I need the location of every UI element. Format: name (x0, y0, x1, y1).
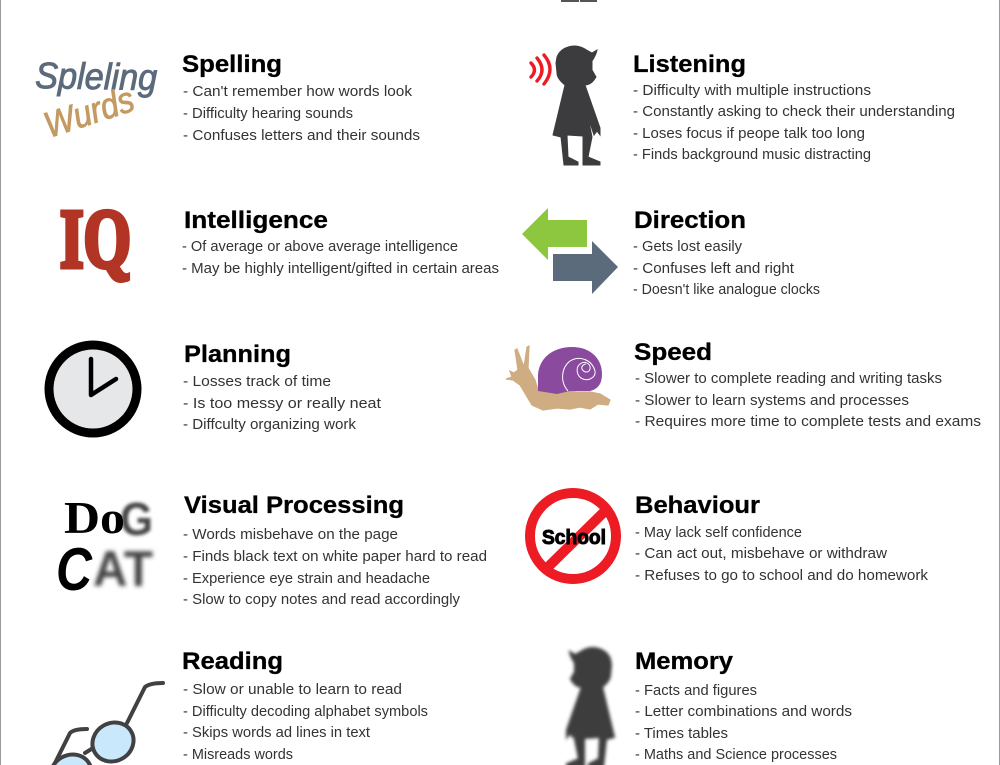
text: speed symptoms: - Requires more time to complete tests and exams (635, 413, 981, 430)
icon: misspelled words: Wurds (39, 78, 139, 146)
icon: snail (506, 346, 610, 410)
panel: spelling (35, 51, 420, 146)
icon: clock (49, 345, 137, 433)
text: visual processing symptoms: - Experience eye strain and headache (183, 570, 430, 587)
panel: intelligence (60, 193, 499, 286)
text: reading symptoms: - Skips words ad lines in text (183, 724, 371, 741)
text: visual processing symptoms: - Finds black text on white paper hard to read (183, 548, 487, 565)
heading: planning: Planning (184, 341, 291, 368)
text: visual processing symptoms: - Words misbehave on the page (183, 526, 398, 543)
text: behaviour symptoms: - Can act out, misbehave or withdraw (635, 545, 887, 562)
text: planning symptoms: - Is too messy or really neat (183, 395, 382, 412)
text: planning symptoms (183, 373, 382, 433)
panel: planning (49, 341, 382, 433)
text: direction symptoms: - Doesn't like analogue clocks (633, 281, 820, 298)
text: memory difficulties: - Facts and figures (635, 682, 757, 699)
heading: memory: Memory (635, 648, 734, 675)
text: spelling symptoms: - Can't remember how words look (183, 83, 413, 100)
text: memory difficulties (635, 682, 852, 763)
icon: grey right arrow (553, 241, 618, 294)
panel: reading (43, 648, 428, 765)
text: listening symptoms: - Constantly asking to check their understanding (633, 103, 955, 120)
text: planning symptoms: - Losses track of time (183, 373, 331, 390)
icon: glasses (43, 683, 163, 765)
text: spelling symptoms (183, 83, 420, 144)
text: reading symptoms: - Slow or unable to learn to read (183, 681, 402, 698)
heading: spelling: Spelling (182, 51, 282, 78)
text: memory difficulties: - Times tables (635, 725, 728, 742)
text: listening symptoms (633, 82, 955, 163)
icon: blurred dog cat letters: AT (93, 541, 153, 597)
text: spelling symptoms: - Confuses letters and their sounds (183, 127, 420, 144)
panel: memory (567, 648, 852, 765)
text: listening symptoms: - Difficulty with multiple instructions (633, 82, 871, 99)
text: visual processing symptoms (183, 526, 487, 608)
panel: direction (522, 207, 820, 298)
icon: blurred dog cat letters: Do (64, 492, 125, 543)
heading: direction: Direction (634, 207, 746, 234)
heading: speed: Speed (634, 339, 712, 366)
text: spelling symptoms: - Difficulty hearing sounds (183, 105, 353, 122)
text: reading symptoms: - Difficulty decoding alphabet symbols (183, 703, 428, 720)
icon: no school sign (530, 493, 616, 579)
text: behaviour symptoms (635, 524, 928, 584)
text: intelligence traits: - May be highly intelligent/gifted in certain areas (182, 260, 499, 277)
text: intelligence traits: - Of average or above average intelligence (182, 238, 458, 255)
text: speed symptoms (635, 370, 981, 430)
panel: behaviour (530, 492, 928, 584)
panel: listening (531, 46, 955, 165)
heading: listening: Listening (633, 51, 746, 78)
text: direction symptoms: - Confuses left and right (633, 260, 795, 277)
icon: no school sign: School (542, 527, 606, 549)
text: listening symptoms: - Finds background music distracting (633, 146, 871, 163)
icon: blurred dog cat letters: G (120, 493, 153, 545)
icon: green left arrow (522, 208, 587, 260)
text: behaviour symptoms: - May lack self confidence (635, 524, 802, 541)
text: planning symptoms: - Diffculty organizing work (183, 416, 357, 433)
heading: behaviour: Behaviour (635, 492, 760, 519)
icon: blurred dog cat letters (56, 492, 153, 603)
text: behaviour symptoms: - Refuses to go to school and do homework (635, 567, 928, 584)
heading: visual processing: Visual Processing (184, 492, 404, 519)
icon: IQ: IQ (60, 193, 131, 286)
heading: reading: Reading (182, 648, 283, 675)
heading: intelligence: Intelligence (184, 207, 328, 234)
text: direction symptoms: - Gets lost easily (633, 238, 742, 255)
icon: blurred dog cat letters: C (56, 536, 93, 603)
text: listening symptoms: - Loses focus if peope talk too long (633, 125, 865, 142)
text: reading symptoms (183, 681, 428, 763)
icon: misspelled words: Spleling (35, 55, 158, 98)
text: speed symptoms: - Slower to learn systems and processes (635, 392, 909, 409)
text: memory difficulties: - Maths and Science processes (635, 746, 837, 763)
icon: cropped figure feet at top (561, 0, 597, 2)
panel: speed (506, 339, 981, 430)
icon: blurred figure (567, 648, 614, 765)
text: speed symptoms: - Slower to complete reading and writing tasks (635, 370, 942, 387)
text: reading symptoms: - Misreads words (183, 746, 293, 763)
text: memory difficulties: - Letter combinations and words (635, 703, 852, 720)
icon: figure with sound waves (531, 46, 600, 165)
text: visual processing symptoms: - Slow to copy notes and read accordingly (183, 591, 460, 608)
text: direction symptoms (633, 238, 820, 298)
panel: visual processing (56, 492, 487, 608)
text: intelligence traits (182, 238, 499, 277)
